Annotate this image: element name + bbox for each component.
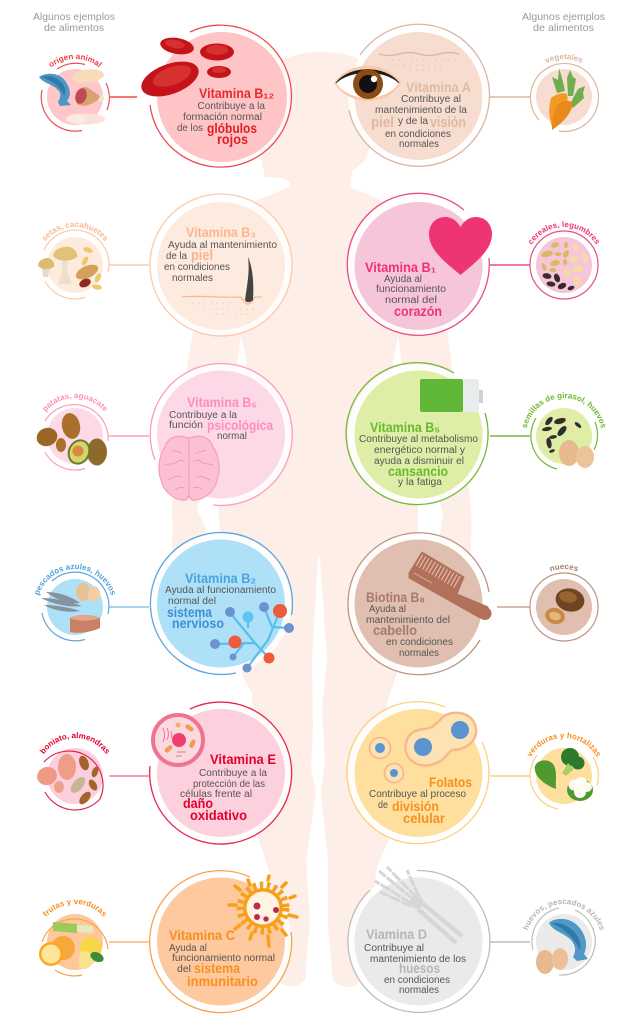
panel: vitamin D: [347, 866, 604, 1014]
panel: vitamin C: [39, 870, 299, 1014]
text: C: funcionamiento normal: [172, 953, 275, 964]
disc: [157, 878, 285, 1006]
icon: virus: [229, 876, 297, 946]
text: A: en condiciones: [385, 129, 451, 140]
connector: [490, 775, 530, 777]
text: A: [371, 80, 471, 150]
text: A: Vitamina A: [406, 80, 471, 95]
ring: [150, 702, 292, 844]
text: B2: sistema: [167, 605, 212, 620]
text: D: normales: [399, 985, 439, 996]
ring: [346, 363, 488, 505]
text: B2: normal del: [168, 596, 216, 607]
right column heading: Algunos ejemplos: [522, 11, 605, 23]
text: folates: [369, 775, 472, 826]
text: A: visión: [430, 114, 466, 131]
text: B2: [165, 571, 276, 631]
icon: eye and skin: [334, 52, 459, 101]
text: D: huesos: [399, 961, 440, 976]
text: B12: glóbulos: [207, 121, 257, 136]
text: B1: funcionamiento: [376, 284, 446, 295]
text: A: y de la: [398, 116, 428, 127]
disc: [354, 878, 482, 1006]
connector: [109, 96, 137, 98]
text: B12: [177, 86, 274, 147]
text: B1: corazón: [394, 304, 442, 319]
disc: [354, 370, 482, 498]
food circle: huevos, pescados azules: [522, 900, 604, 976]
food circle: semillas de girasol, huevos: [522, 392, 606, 470]
disc: [157, 32, 287, 162]
text: B6: psicológica: [207, 418, 273, 433]
text: B6: función: [169, 420, 203, 431]
text: folates: de: [378, 800, 388, 811]
food circle: frutas y verduras: frutas y verduras: [42, 900, 106, 917]
text: B6: Vitamina B₆: [187, 395, 257, 410]
connector: [490, 96, 530, 98]
text: B3: Vitamina B₃: [186, 225, 256, 240]
panel: folates: [346, 701, 600, 844]
text: folates: Folatos: [429, 775, 472, 790]
text: C: Ayuda al: [169, 943, 207, 954]
text: B12: rojos: [217, 132, 248, 147]
connector: [497, 606, 530, 608]
text: A: Contribuye al: [401, 94, 461, 105]
text: E: protección de las: [193, 779, 265, 790]
text: B5: ayuda a disminuir el: [374, 456, 464, 467]
text: E: Vitamina E: [210, 752, 276, 767]
food circle: setas, cacahuetes: [38, 222, 110, 300]
text: B3: normales: [172, 273, 213, 284]
icon: battery: [420, 379, 483, 412]
text: B2: Ayuda al funcionamiento: [165, 585, 276, 596]
text: B6: normal: [217, 431, 247, 442]
text: C: Vitamina C: [169, 928, 235, 943]
connector: [109, 606, 149, 608]
panel: vitamin B1: [346, 192, 599, 336]
text: B5: y la fatiga: [398, 477, 442, 488]
food circle: huevos, pescados azules: huevos, pescados azules: [522, 900, 604, 930]
disc: [354, 32, 482, 160]
text: B5: energético normal y: [374, 445, 465, 456]
text: B8: Ayuda al: [369, 604, 406, 615]
text: B8: en condiciones: [386, 637, 453, 648]
food circle: semillas de girasol, huevos: semillas de girasol, huevos: [522, 392, 606, 428]
food circle: cereales, legumbres: cereales, legumbres: [529, 221, 599, 244]
text: B3: piel: [191, 247, 213, 264]
text: B8: Biotina B₈: [366, 590, 425, 605]
text: E: Contribuye a la: [199, 768, 267, 779]
disc: [354, 202, 482, 330]
panel: vitamin B6: [36, 362, 293, 506]
text: B3: en condiciones: [164, 262, 230, 273]
text: D: mantenimiento de los: [370, 954, 466, 965]
food circle: pescados azules, huevos: [34, 564, 115, 642]
text: B8: [366, 590, 453, 659]
food circle: pescados azules, huevos: pescados azules, huevos: [34, 564, 115, 596]
food circle: setas, cacahuetes: setas, cacahuetes: [42, 222, 108, 241]
text: B5: Vitamina B₅: [370, 420, 440, 435]
ring: [150, 363, 292, 505]
text: B5: cansancio: [388, 464, 448, 479]
icon: dividing cells: [370, 713, 476, 782]
food circle: vegetales: vegetales: [544, 54, 582, 63]
panel: vitamin E: [37, 701, 292, 845]
icon: red blood cells: [137, 35, 234, 103]
ring: [150, 533, 292, 675]
left column heading: de alimentos: [44, 22, 104, 34]
text: B12: de los: [177, 123, 203, 134]
connector: [109, 775, 149, 777]
text: A: normales: [399, 139, 439, 150]
disc: [157, 709, 285, 837]
ring: [150, 871, 292, 1013]
text: D: Viamina D: [366, 927, 427, 942]
text: B12: formación normal: [183, 112, 262, 123]
text: folates: división: [392, 799, 439, 814]
text: D: en condiciones: [384, 975, 450, 986]
text: D: Contribuye al: [364, 943, 424, 954]
text: B3: Ayuda al mantenimiento: [168, 240, 277, 251]
ring: [347, 702, 489, 844]
panel: vitamin B3: [38, 193, 293, 337]
text: B6: [169, 395, 273, 442]
text: E: daño: [183, 796, 213, 811]
ring: [349, 24, 489, 166]
food circle: frutas y verduras: [39, 900, 109, 976]
text: C: [169, 928, 275, 989]
text: B2: Vitamina B₂: [185, 571, 256, 586]
left column heading: [33, 11, 115, 34]
food circle: vegetales: [530, 54, 599, 132]
food circle: boniato, almendras: [37, 732, 109, 811]
text: B1: [365, 260, 446, 319]
right column heading: de alimentos: [533, 22, 594, 34]
text: B2: nervioso: [172, 616, 224, 631]
text: E: células frente al: [180, 789, 252, 800]
food circle: verduras y hortalizas: [527, 732, 600, 810]
text: B8: mantenimiento del: [366, 615, 450, 626]
text: B3: [164, 225, 277, 284]
food circle: nueces: [529, 564, 599, 642]
food circle: nueces: nueces: [550, 564, 578, 572]
text: C: sistema: [194, 961, 240, 976]
food circle: origen animal: origen animal: [49, 54, 102, 68]
ring: [348, 533, 489, 675]
text: A: piel: [371, 114, 394, 131]
food circle: origen animal: [39, 54, 110, 132]
disc: [157, 540, 285, 668]
food circle: boniato, almendras: boniato, almendras: [40, 732, 109, 754]
disc: [157, 370, 285, 498]
text: B3: de la: [166, 251, 187, 262]
ring: [150, 25, 291, 167]
left column heading: Algunos ejemplos: [33, 11, 115, 23]
food circle: cereales, legumbres: [529, 221, 599, 300]
connector: [490, 941, 530, 943]
ring: [348, 870, 490, 1012]
food circle: patatas, aguacate: patatas, aguacate: [42, 394, 107, 412]
connector: [109, 264, 149, 266]
ring: [347, 193, 489, 335]
icon: neuron: [210, 602, 294, 672]
panel: vitamin A: [334, 24, 599, 167]
text: A: mantenimiento de la: [375, 105, 467, 116]
panel: biotin B8: [347, 532, 599, 676]
text: C: inmunitario: [187, 974, 258, 989]
icon: skin and hair: [182, 257, 262, 314]
ring: [150, 194, 292, 336]
text: D: [364, 927, 466, 996]
text: B1: Vitamina B₁: [365, 260, 436, 275]
icon: arm bones: [375, 867, 462, 943]
text: B5: Contribuye al metabolismo: [359, 434, 478, 445]
text: B12: Contribuye a la: [198, 101, 265, 112]
connector: [109, 941, 149, 943]
icon: heart: [429, 217, 492, 275]
disc: [354, 540, 482, 668]
text: E: oxidativo: [190, 808, 247, 823]
connector: [109, 435, 149, 437]
text: B1: Ayuda al: [384, 274, 422, 285]
panel: vitamin B5: [345, 362, 606, 506]
panel: vitamin B2: [34, 532, 294, 676]
disc: [354, 709, 482, 837]
text: B5: [359, 420, 478, 488]
body silhouette: [172, 52, 471, 987]
connector: [490, 435, 530, 437]
connector: [490, 264, 530, 266]
text: folates: Contribuye al proceso: [369, 789, 466, 800]
text: B8: normales: [399, 648, 439, 659]
icon: brain: [159, 436, 219, 500]
text: B8: cabello: [373, 623, 417, 638]
text: E: [180, 752, 276, 823]
right column heading: [522, 11, 605, 34]
text: folates: celular: [403, 811, 446, 826]
food circle: verduras y hortalizas: verduras y hortalizas: [527, 732, 600, 756]
icon: comb: [409, 552, 492, 620]
panel: vitamin B12: [39, 24, 292, 168]
text: B6: Contribuye a la: [169, 410, 237, 421]
food circle: patatas, aguacate: [36, 394, 109, 471]
text: B12: Vitamina B₁₂: [199, 86, 274, 101]
icon: cell: [153, 715, 203, 765]
text: C: del: [177, 964, 191, 975]
disc: [157, 202, 285, 330]
text: B1: normal del: [385, 295, 437, 306]
